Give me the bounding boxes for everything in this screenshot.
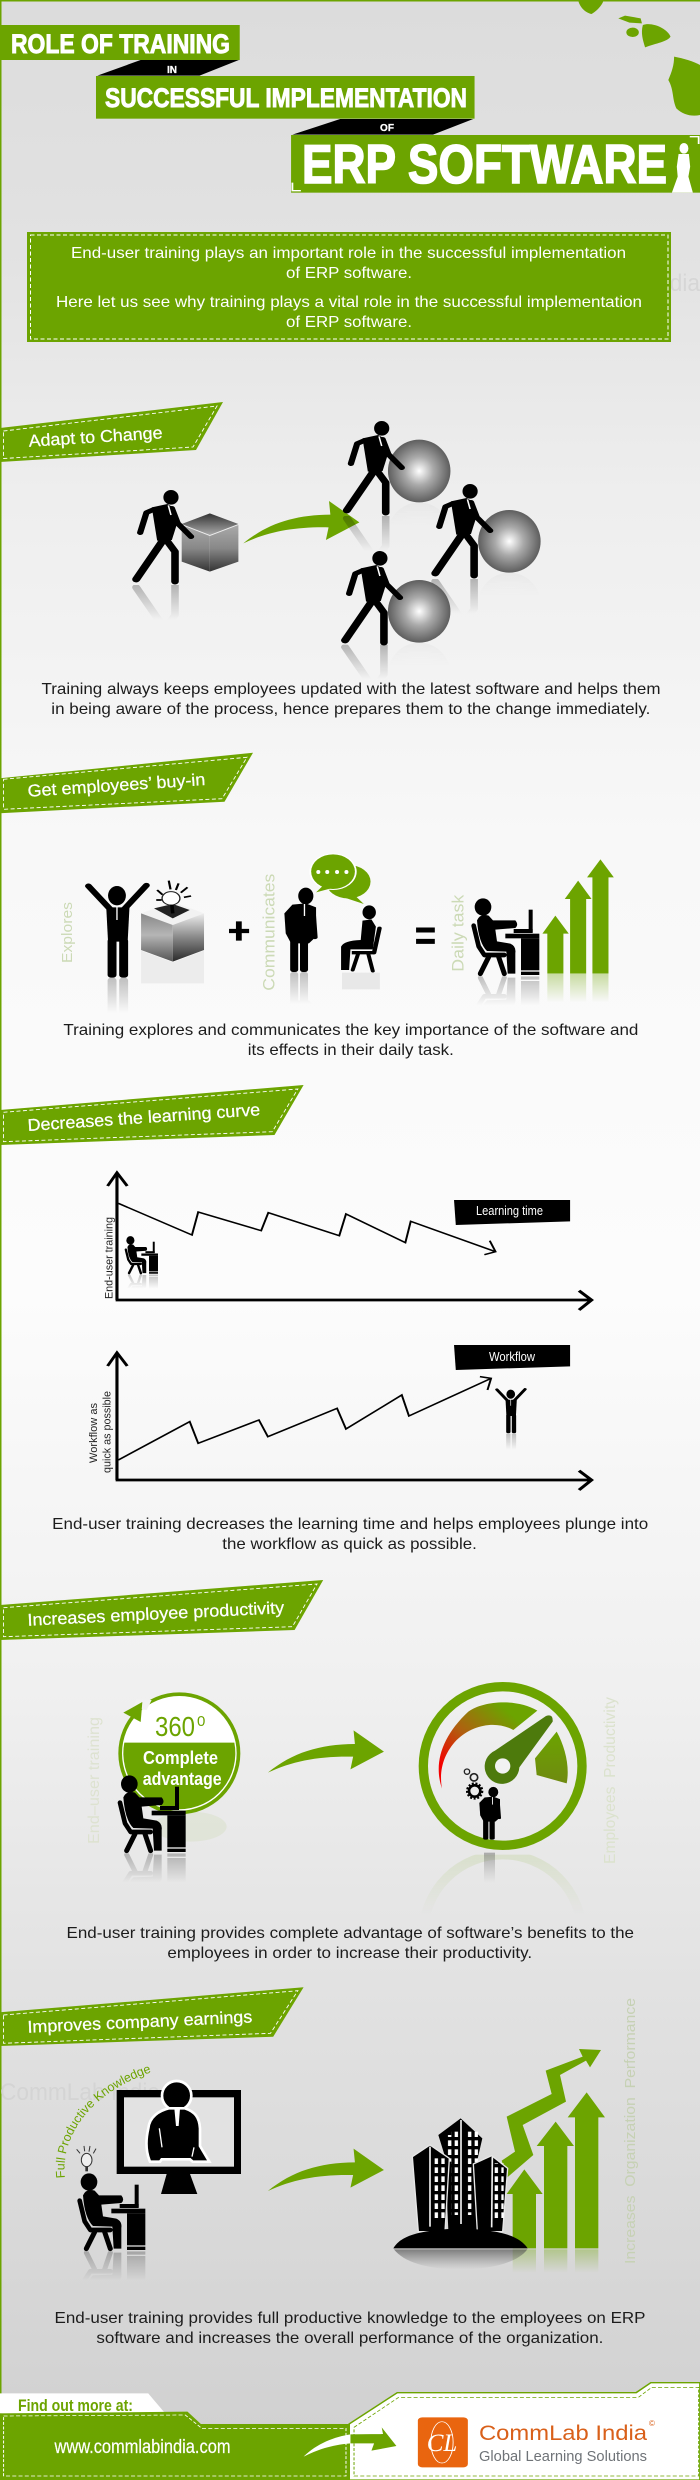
desk worker with badge <box>118 1775 186 1878</box>
figure with sphere top <box>342 421 450 546</box>
title line 2: SUCCESSFUL IMPLEMENTATION <box>105 83 467 113</box>
arrow <box>268 1730 384 1773</box>
footer find-out tab <box>0 2393 165 2413</box>
arrow <box>243 501 359 543</box>
equals sign <box>416 930 435 941</box>
panel: get employees' buy-in <box>0 753 638 1070</box>
connector word of: OF <box>380 123 394 134</box>
caption: software and increases the overall performance of the organization. <box>96 2330 603 2347</box>
illustration: explores + communicates = daily task <box>88 853 614 1070</box>
caption <box>52 1516 648 1553</box>
axis label quick as possible: quick as possible <box>102 1391 114 1473</box>
intro text <box>56 245 642 331</box>
intro text: of ERP software. <box>286 314 412 331</box>
illustration: employee with box changing to employees with spheres <box>136 421 541 736</box>
learning time tag text: Learning time <box>476 1203 543 1218</box>
badge degree: 0 <box>197 1713 205 1730</box>
panel: increases employee productivity <box>0 1580 634 2013</box>
intro text: of ERP software. <box>286 265 412 282</box>
chart: learning time <box>108 1173 592 1310</box>
panel: adapt to change <box>0 402 660 736</box>
caption <box>54 2310 646 2347</box>
footer arrow <box>304 2427 396 2457</box>
ribbon heading: earnings: Improves company earnings <box>27 2007 253 2037</box>
intro text: End-user training plays an important role in the successful implementation <box>71 245 626 262</box>
ribbon heading: buy-in <box>0 753 253 813</box>
label communicates: Communicates <box>260 874 278 991</box>
logo mark <box>418 2417 468 2467</box>
footer green panel <box>0 2412 349 2480</box>
ribbon heading: buy-in: Get employees’ buy-in <box>27 770 206 801</box>
figure standing <box>284 888 318 1000</box>
faint watermark: CommLab India <box>0 2079 161 2106</box>
ribbon heading: earnings <box>0 1987 304 2046</box>
figure with sphere right <box>431 484 541 609</box>
caption: in being aware of the process, hence prepares them to the change immediately. <box>51 701 650 718</box>
gears and employee <box>464 1769 500 1883</box>
connector word in: IN <box>167 65 177 76</box>
gauge <box>418 1682 587 1897</box>
label explores: Explores <box>59 902 76 963</box>
growth arrows <box>542 859 614 1002</box>
plus sign <box>229 921 249 941</box>
label employees productivity: Employees Productivity <box>602 1697 619 1864</box>
caption: the workflow as quick as possible. <box>222 1536 477 1553</box>
website url: www.commlabindia.com <box>54 2437 230 2458</box>
title line 1: ROLE OF TRAINING <box>11 29 230 59</box>
caption: Training explores and communicates the key importance of the software and <box>63 1022 638 1039</box>
badge 360: 360 <box>155 1711 195 1742</box>
desk worker: daily task <box>471 898 540 1001</box>
find out more text: Find out more at: <box>18 2396 133 2415</box>
city buildings <box>393 2118 528 2269</box>
footer logo panel <box>349 2383 700 2480</box>
caption <box>66 1925 634 1962</box>
light bulb <box>77 2146 96 2171</box>
caption: Training always keeps employees updated with the latest software and helps them <box>42 681 660 698</box>
ribbon heading: adapt to change: Adapt to Change <box>28 423 163 451</box>
footer <box>0 2383 700 2480</box>
circular badge <box>118 1692 240 1842</box>
figure with box <box>132 490 238 615</box>
figure with sphere bottom <box>341 551 450 675</box>
charts <box>108 1173 592 1490</box>
intro text: Here let us see why training plays a vital role in the successful implementation <box>56 294 642 311</box>
caption: employees in order to increase their productivity. <box>167 1945 532 1962</box>
ribbon heading: productivity <box>0 1580 323 1640</box>
axis label end-user training: End-user training <box>104 1217 116 1299</box>
ribbon heading: learning curve <box>0 1085 304 1145</box>
panel: decreases the learning curve <box>0 1085 648 1553</box>
panel: improves company earnings <box>2 1987 646 2347</box>
figure explores with lit box <box>85 880 204 1008</box>
caption: its effects in their daily task. <box>248 1042 454 1059</box>
chart: workflow <box>108 1345 592 1490</box>
ribbon heading: productivity: Increases employee productivity <box>27 1598 285 1630</box>
axis label workflow as: Workflow as <box>88 1403 100 1463</box>
performance arrows and city <box>393 2049 605 2273</box>
caption: End-user training provides full productive knowledge to the employees on ERP <box>54 2310 646 2327</box>
caption <box>63 1022 638 1059</box>
rising arrows <box>507 2092 605 2273</box>
label end-user training: End–user training <box>86 1717 103 1844</box>
desk worker <box>77 2173 146 2276</box>
brand tagline: Global Learning Solutions <box>479 2449 647 2465</box>
badge complete: Complete <box>143 1748 218 1768</box>
caption: End-user training decreases the learning time and helps employees plunge into <box>52 1516 648 1533</box>
ribbon heading: learning curve: Decreases the learning curve <box>27 1100 261 1135</box>
intro panel <box>27 232 671 342</box>
label daily task: Daily task <box>448 894 467 972</box>
caption <box>42 681 660 718</box>
badge advantage: advantage <box>143 1769 222 1789</box>
label increases organization performance: Increases Organization Performance <box>622 1998 639 2264</box>
caption: End-user training provides complete advantage of software’s benefits to the <box>66 1925 634 1942</box>
header title <box>0 0 700 195</box>
speech bubbles <box>309 853 371 904</box>
zigzag performance arrow <box>502 2049 601 2177</box>
copyright mark: © <box>649 2419 655 2428</box>
small desk worker <box>124 1236 158 1286</box>
logo initials: CL <box>427 2430 457 2457</box>
brand name: CommLab India <box>479 2422 647 2445</box>
title banners <box>0 25 700 193</box>
arrow <box>268 2149 384 2191</box>
ribbon heading: adapt to change <box>0 402 223 462</box>
map decoration: islands <box>578 0 700 116</box>
curved label full productive knowledge: Full Productive Knowledge <box>56 2066 150 2178</box>
workflow tag text: Workflow <box>489 1349 536 1364</box>
monitor with presenter <box>117 2081 241 2194</box>
figure seated <box>341 905 380 989</box>
